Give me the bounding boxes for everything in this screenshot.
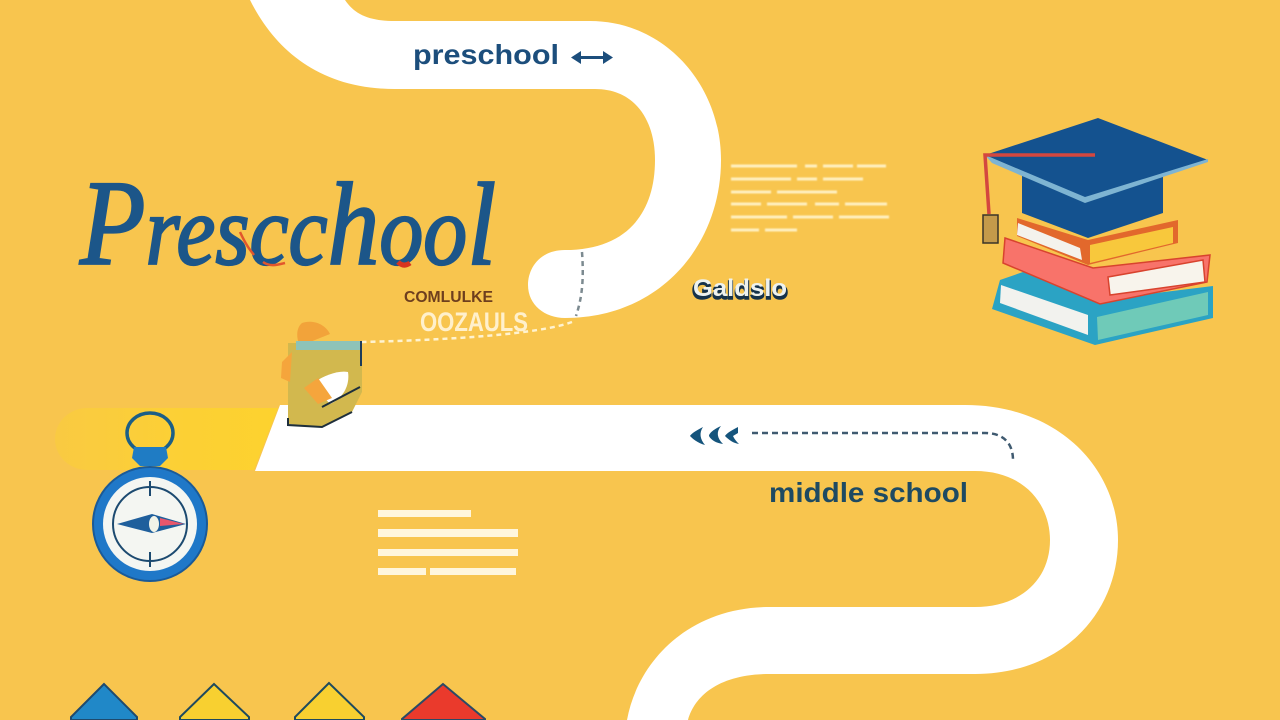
top winding road bbox=[250, 0, 721, 318]
dotted connector: road to book bbox=[362, 252, 583, 342]
bottom triangle: blue bbox=[71, 684, 137, 720]
outlined label: Galdslo bbox=[693, 275, 787, 302]
icon: book with bow bbox=[281, 322, 362, 427]
title accents bbox=[240, 232, 410, 265]
label: preschool: preschool bbox=[413, 39, 559, 70]
white list lines bbox=[378, 510, 518, 575]
middle book bbox=[1003, 238, 1210, 304]
chevrons bbox=[690, 426, 739, 445]
icon: compass bbox=[93, 413, 207, 581]
bottom triangle: yellow bbox=[180, 684, 249, 720]
yellow start band bbox=[55, 408, 278, 470]
label: middle school: middle school bbox=[769, 477, 968, 508]
tassel bbox=[985, 155, 1095, 214]
small white label: OOZAULS bbox=[420, 307, 528, 337]
title: Prescchool bbox=[79, 156, 496, 291]
icon: graduation cap on books bbox=[983, 118, 1213, 345]
bottom winding road bbox=[255, 405, 1118, 720]
cap board bbox=[985, 118, 1208, 198]
top book bbox=[1017, 218, 1178, 265]
bottom triangle: red bbox=[402, 684, 485, 720]
dashed route line bbox=[752, 433, 1013, 460]
cap base bbox=[1022, 170, 1163, 238]
white text block bbox=[731, 166, 889, 230]
small brown label: COMLULKE bbox=[404, 289, 493, 306]
outlined label: Galdslo bbox=[692, 277, 788, 305]
bottom triangle: yellow bbox=[295, 683, 364, 720]
double-headed arrow bbox=[571, 51, 613, 64]
bottom book bbox=[992, 272, 1213, 345]
